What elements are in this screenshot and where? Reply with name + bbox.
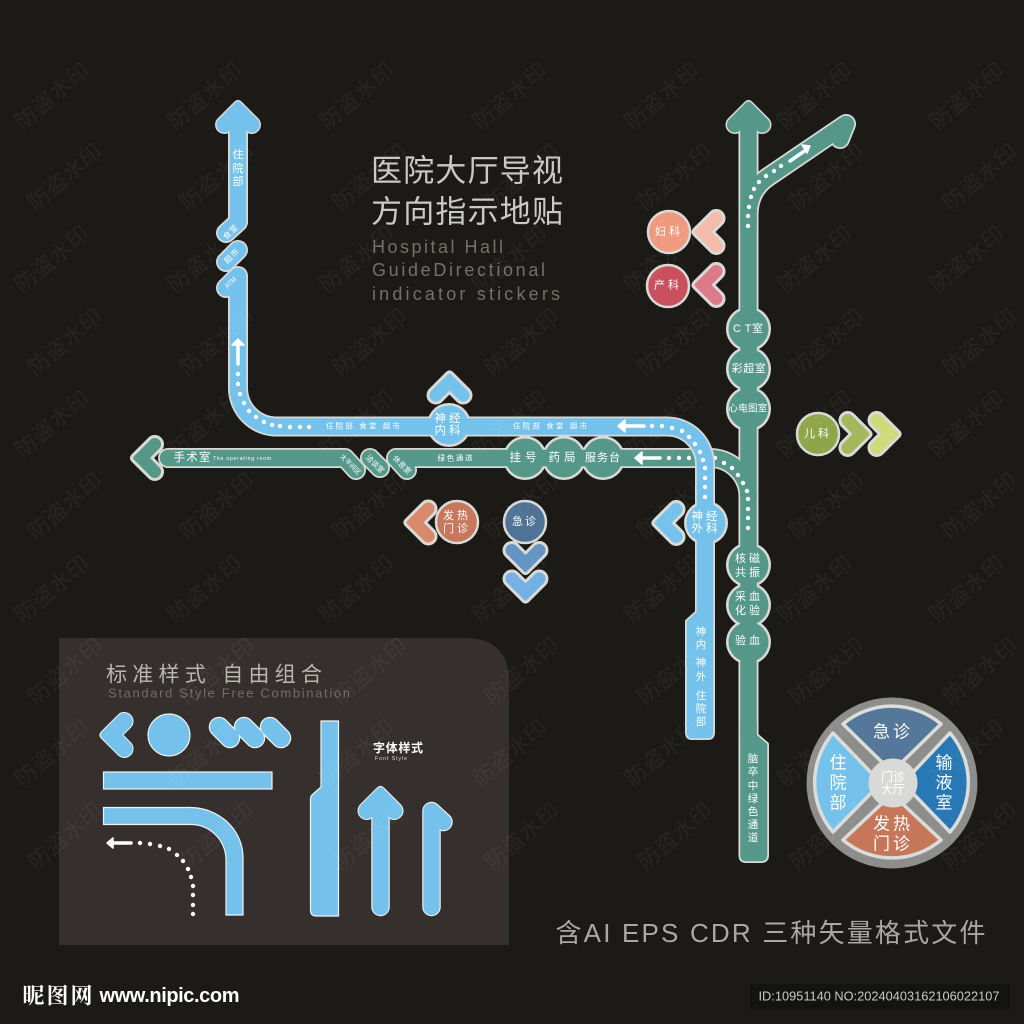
watermark: 防盗水印: [467, 385, 553, 463]
watermark: 防盗水印: [632, 797, 718, 875]
marker: obstetrics: [647, 264, 724, 307]
route labels: green: 洽谈室: [364, 452, 387, 475]
blue route network: [217, 101, 728, 738]
watermark: 防盗水印: [9, 220, 95, 298]
route labels: green: 化验: [735, 603, 763, 617]
font style label: [373, 740, 423, 762]
wheel labels: 急诊: [873, 722, 913, 742]
watermark: 防盗水印: [314, 714, 400, 792]
route labels: green: 绿色通道: [438, 452, 473, 462]
watermark: 防盗水印: [314, 220, 400, 298]
watermark: 防盗水印: [619, 550, 705, 628]
watermark: 防盗水印: [327, 797, 413, 875]
watermark: 防盗水印: [632, 303, 718, 381]
sample: circle: [148, 714, 190, 756]
site logo: 昵图网: [22, 980, 92, 1010]
marker: emergency: [504, 501, 547, 602]
watermark: 防盗水印: [772, 550, 858, 628]
watermark: 防盗水印: [162, 385, 248, 463]
watermark: 防盗水印: [619, 385, 705, 463]
sample: diagonal pills: [219, 727, 281, 738]
title: [371, 154, 563, 230]
watermark: 防盗水印: [937, 797, 1023, 875]
english subtitle: Hospital Hall: [372, 237, 503, 257]
english subtitle: indicator stickers: [372, 284, 560, 304]
watermark: 防盗水印: [784, 467, 870, 545]
blue route dots and arrows: [232, 339, 707, 499]
watermark: 防盗水印: [174, 303, 260, 381]
watermark: 防盗水印: [924, 714, 1010, 792]
watermark: 防盗水印: [162, 714, 248, 792]
title: 方向指示地贴: [371, 194, 563, 230]
site logo: www.nipic.com: [98, 985, 240, 1007]
watermark: 防盗水印: [467, 550, 553, 628]
title: 医院大厅导视: [371, 154, 563, 188]
route labels: green: 脑卒中绿色通道: [748, 752, 759, 844]
marker: pediatrics: [797, 413, 900, 455]
route labels: green: 彩超室: [732, 361, 766, 375]
watermark: 防盗水印: [327, 303, 413, 381]
watermark: 防盗水印: [772, 57, 858, 135]
sample: chevron: [101, 714, 132, 756]
watermark: 防盗水印: [479, 138, 565, 216]
english subtitle: GuideDirectional: [372, 260, 545, 280]
english subtitle: [372, 237, 560, 304]
image id: [750, 984, 1010, 1009]
green route dots and arrows: [635, 145, 810, 530]
route labels: blue: 神经: [434, 411, 464, 425]
route labels: green: 核磁: [735, 551, 763, 565]
chevron: up to neurology: [428, 372, 471, 403]
watermark: 防盗水印: [22, 632, 108, 710]
watermark: 防盗水印: [479, 632, 565, 710]
watermark: 防盗水印: [314, 385, 400, 463]
marker: emergency: 急诊: [512, 514, 538, 528]
panel: standard styles: [59, 638, 509, 945]
route labels: blue: 神内神外住院部: [696, 625, 707, 728]
green route network: [168, 101, 846, 861]
watermark: 防盗水印: [467, 57, 553, 135]
wheel labels: 输液室: [936, 754, 952, 812]
route labels: green: 采血: [735, 589, 763, 603]
watermark: 防盗水印: [22, 467, 108, 545]
watermark: 防盗水印: [9, 714, 95, 792]
wheel labels: 住院部: [830, 754, 846, 812]
wheel diagram: [806, 698, 978, 868]
watermark: 防盗水印: [479, 467, 565, 545]
watermark: 防盗水印: [479, 303, 565, 381]
watermark: 防盗水印: [327, 632, 413, 710]
watermark: 防盗水印: [619, 220, 705, 298]
route labels: green: 手术室: [174, 450, 210, 464]
watermark: 防盗水印: [937, 632, 1023, 710]
sample: dotted arrow: [107, 838, 195, 916]
wheel labels: 发热: [873, 814, 913, 834]
panel heading: 标准样式 自由组合: [106, 664, 322, 686]
watermark: 防盗水印: [9, 57, 95, 135]
watermark: 防盗水印: [479, 797, 565, 875]
watermark: 防盗水印: [632, 467, 718, 545]
watermark: 防盗水印: [22, 797, 108, 875]
marker: fever clinic: [405, 501, 478, 544]
wheel labels: [830, 722, 952, 854]
sample: bottle-shaped bar: [310, 721, 338, 916]
wheel hub: [868, 758, 918, 808]
wheel labels: 大厅: [881, 782, 905, 796]
route labels: blue: 住院部: [232, 147, 244, 188]
route labels: blue: 食堂: [221, 222, 241, 242]
route labels: blue: 超市: [222, 246, 242, 266]
watermark: 防盗水印: [467, 220, 553, 298]
route labels: blue: 内科: [434, 423, 464, 437]
marker: gynecology: [648, 211, 724, 253]
watermark: 防盗水印: [772, 385, 858, 463]
font style label: 字体样式: [373, 740, 423, 755]
wheel segment: fever clinic: [843, 794, 941, 858]
panel subheading: Standard Style Free Combination: [108, 686, 350, 700]
watermark: 防盗水印: [22, 138, 108, 216]
arrowhead: operating room: [131, 437, 163, 479]
watermark: 防盗水印: [924, 220, 1010, 298]
watermark: 防盗水印: [174, 467, 260, 545]
sample: straight bar: [104, 772, 272, 789]
route labels: blue: ATM: [224, 276, 238, 290]
route labels: green: The operating room: [213, 456, 271, 462]
watermark: 防盗水印: [467, 714, 553, 792]
watermark: 防盗水印: [314, 57, 400, 135]
wheel segment: emergency: [843, 706, 941, 772]
watermark: 防盗水印: [632, 632, 718, 710]
route labels: blue: 住院部 食堂 超市: [326, 420, 400, 430]
watermark: 防盗水印: [784, 138, 870, 216]
watermark: 防盗水印: [327, 138, 413, 216]
route labels: green: 太平间区: [338, 452, 363, 477]
marker: pediatrics: 儿科: [804, 426, 832, 440]
site logo: [22, 980, 240, 1010]
watermark: 防盗水印: [174, 138, 260, 216]
chevron: left to neurosurgery: [653, 502, 684, 544]
watermark: 防盗水印: [784, 797, 870, 875]
sample: curved bar: [104, 808, 243, 915]
route labels: green: 服务台: [585, 450, 621, 464]
marker: gynecology: 妇科: [655, 224, 683, 238]
watermark: 防盗水印: [619, 714, 705, 792]
route labels: green: [174, 321, 768, 844]
watermark: 防盗水印: [619, 57, 705, 135]
route labels: blue: 外科: [692, 521, 720, 535]
watermark: 防盗水印: [9, 385, 95, 463]
route labels: green: 休息室: [391, 453, 414, 476]
watermark: 防盗水印: [22, 303, 108, 381]
sample: two-sided arrow: [359, 787, 402, 907]
marker: fever clinic: 发热: [443, 508, 471, 522]
watermark: 防盗水印: [314, 550, 400, 628]
route labels: blue: [221, 147, 720, 728]
watermark: 防盗水印: [162, 220, 248, 298]
watermark: 防盗水印: [937, 467, 1023, 545]
route labels: green: 验血: [735, 633, 763, 647]
sample: one-sided arrow: [432, 811, 444, 907]
watermark: 防盗水印: [174, 797, 260, 875]
wheel segment: inpatient: [815, 733, 881, 832]
route labels: blue: 神经: [692, 509, 720, 523]
watermark: 防盗水印: [632, 138, 718, 216]
watermark: 防盗水印: [937, 303, 1023, 381]
route labels: green: 共振: [735, 565, 763, 579]
watermark: 防盗水印: [174, 632, 260, 710]
wheel segment: infusion: [903, 733, 968, 832]
watermark: 防盗水印: [937, 138, 1023, 216]
route labels: green: 心电图室: [728, 402, 768, 414]
route labels: green: 挂号: [510, 450, 540, 464]
route labels: green: C T室: [733, 321, 763, 335]
watermark: 防盗水印: [924, 385, 1010, 463]
watermark: 防盗水印: [924, 550, 1010, 628]
watermark: 防盗水印: [772, 220, 858, 298]
wheel labels: 门诊: [873, 834, 913, 854]
font style label: Font Style: [375, 756, 407, 762]
route labels: blue: 住院部 食堂 超市: [513, 420, 588, 430]
watermark: 防盗水印: [784, 303, 870, 381]
watermark: 防盗水印: [327, 467, 413, 545]
watermark: 防盗水印: [772, 714, 858, 792]
watermark: 防盗水印: [162, 57, 248, 135]
watermark: 防盗水印: [924, 57, 1010, 135]
marker: obstetrics: 产科: [654, 278, 682, 292]
route labels: green: 药局: [548, 451, 580, 464]
image id: ID:10951140 NO:20240403162106022107: [758, 988, 1000, 1004]
watermark: 防盗水印: [9, 550, 95, 628]
marker: fever clinic: 门诊: [443, 521, 471, 535]
watermark: [9, 57, 1023, 875]
wheel labels: 门诊: [881, 769, 905, 784]
watermark: 防盗水印: [784, 632, 870, 710]
watermark: 防盗水印: [162, 550, 248, 628]
format note: 含AI EPS CDR 三种矢量格式文件: [556, 918, 986, 948]
